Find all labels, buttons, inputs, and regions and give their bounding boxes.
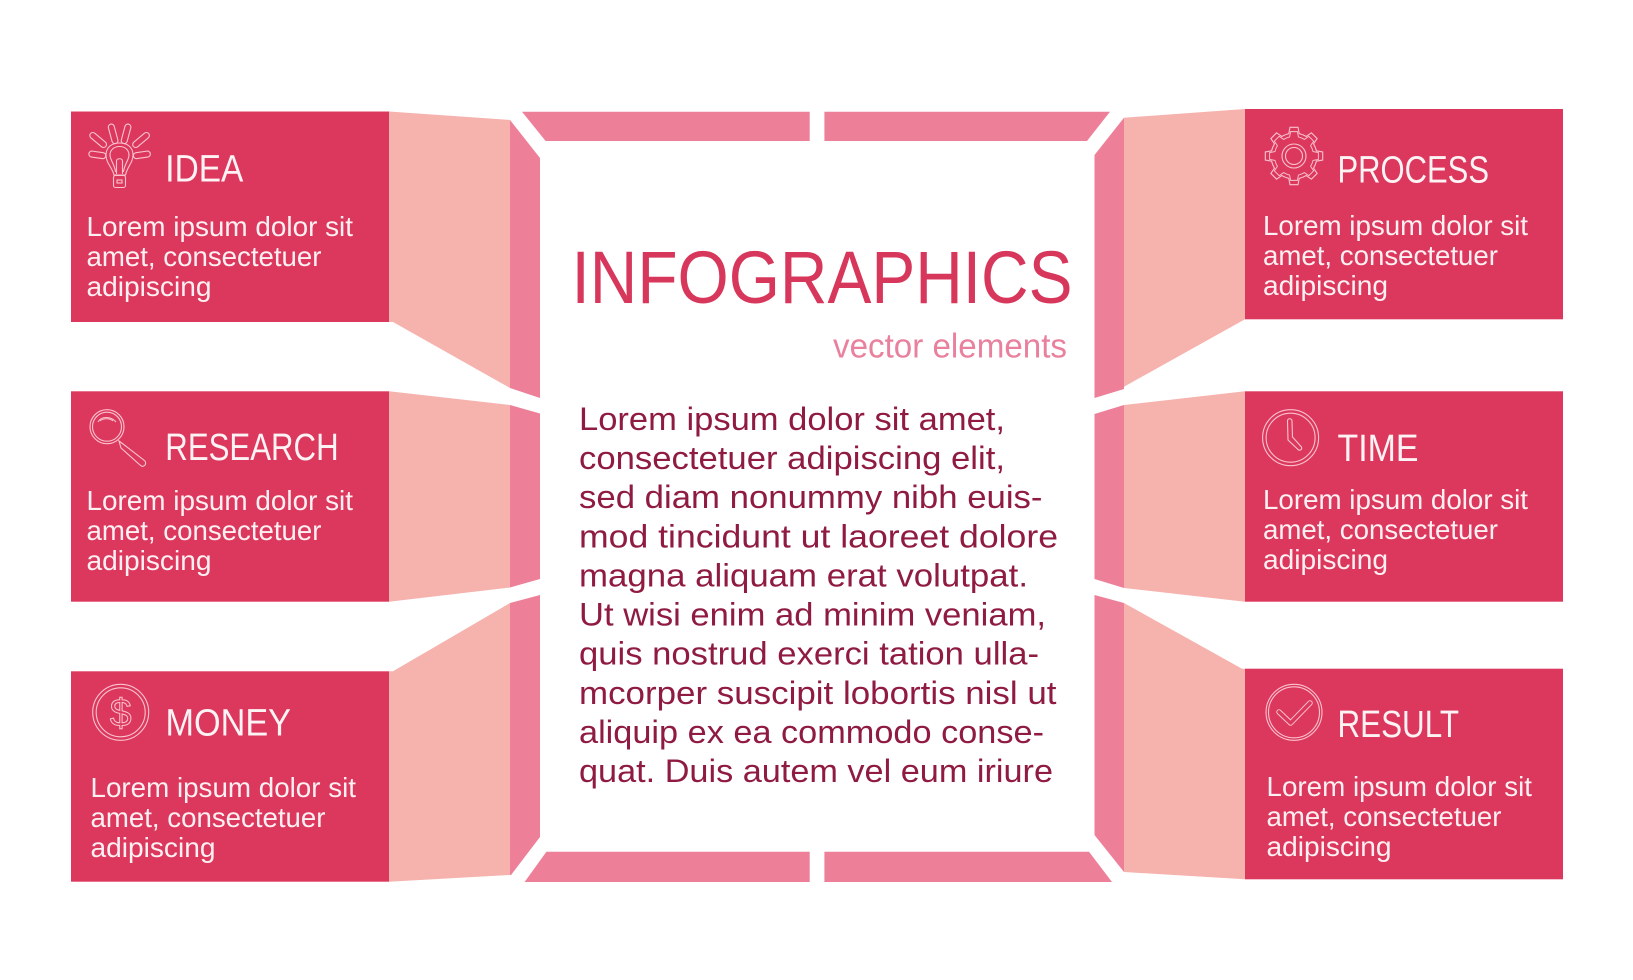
heading: process: PROCESS <box>1338 150 1489 192</box>
text: idea description: amet, consectetuer <box>86 241 322 272</box>
connector: process side <box>1094 118 1124 398</box>
connector: money light <box>389 603 510 882</box>
box: research <box>71 391 389 602</box>
text: process description: amet, consectetuer <box>1263 240 1498 271</box>
connector: research side <box>510 405 540 588</box>
box: result <box>1245 669 1563 879</box>
connector: research light <box>389 391 510 602</box>
text: time description: amet, consectetuer <box>1263 514 1498 545</box>
connector: result side <box>1094 595 1124 872</box>
panel: idea <box>71 112 540 398</box>
heading: money: MONEY <box>166 703 291 745</box>
text: idea description: Lorem ipsum dolor sit <box>86 211 353 242</box>
connector: time side <box>1094 405 1124 588</box>
heading: research: RESEARCH <box>165 427 339 469</box>
icon: clock <box>1263 410 1319 466</box>
connector: process light <box>1124 109 1245 387</box>
connector: time light <box>1124 391 1245 602</box>
text: result description: Lorem ipsum dolor sit <box>1266 771 1532 802</box>
frame: top right bar <box>824 112 1110 141</box>
icon: check mark <box>1266 684 1322 740</box>
text: main paragraph: Lorem ipsum dolor sit amet, <box>579 401 1005 437</box>
text: result description: adipiscing <box>1266 831 1392 862</box>
text: time description: Lorem ipsum dolor sit <box>1263 484 1528 515</box>
text: money description: Lorem ipsum dolor sit <box>90 772 356 803</box>
text: main paragraph: Ut wisi enim ad minim veniam, <box>579 596 1046 632</box>
icon: light bulb <box>88 123 151 188</box>
connector: money side <box>510 595 540 875</box>
text: idea description: adipiscing <box>86 271 212 302</box>
text: money description: adipiscing <box>90 832 216 863</box>
text: main paragraph <box>579 401 1058 789</box>
connector: idea light <box>389 112 510 388</box>
text: main paragraph: quat. Duis autem vel eum iriure <box>579 753 1053 789</box>
text: research description: amet, consectetuer <box>86 515 322 546</box>
panel: money <box>71 595 540 882</box>
frame: top left bar <box>522 112 810 141</box>
icon: dollar coin: $ <box>110 692 132 735</box>
text: main paragraph: quis nostrud exerci tation ulla- <box>579 636 1039 672</box>
text: main paragraph: magna aliquam erat volutpat. <box>579 558 1028 594</box>
icon: gear <box>1265 127 1323 185</box>
title: INFOGRAPHICS <box>572 236 1072 319</box>
panel: result <box>1094 595 1563 879</box>
heading: result: RESULT <box>1338 704 1459 746</box>
text: research description: adipiscing <box>86 545 212 576</box>
text: research description <box>86 485 353 576</box>
box: idea <box>71 112 389 322</box>
heading: time: TIME <box>1338 428 1418 470</box>
heading: idea: IDEA <box>165 149 244 191</box>
box: time <box>1245 391 1563 602</box>
text: time description: adipiscing <box>1263 544 1388 575</box>
box: money <box>71 671 389 882</box>
text: money description: amet, consectetuer <box>90 802 326 833</box>
icon: magnifier <box>90 410 146 466</box>
connector: result light <box>1124 603 1245 879</box>
subtitle: vector elements <box>833 328 1067 366</box>
text: result description <box>1266 771 1532 862</box>
text: main paragraph: sed diam nonummy nibh euis- <box>579 479 1042 515</box>
box: process <box>1245 109 1563 319</box>
text: process description: adipiscing <box>1263 270 1388 301</box>
frame: bottom left bar <box>525 852 810 882</box>
icon: dollar coin <box>93 684 149 740</box>
text: time description <box>1263 484 1528 575</box>
text: research description: Lorem ipsum dolor sit <box>86 485 353 516</box>
text: main paragraph: consectetuer adipiscing elit, <box>579 440 1005 476</box>
frame: bottom right bar <box>824 852 1112 882</box>
text: main paragraph: mcorper suscipit lobortis nisl ut <box>579 675 1056 711</box>
panel: research <box>71 391 540 602</box>
panel: process <box>1094 109 1563 398</box>
connector: idea side <box>510 120 540 398</box>
text: idea description <box>86 211 353 302</box>
text: result description: amet, consectetuer <box>1266 801 1502 832</box>
text: main paragraph: aliquip ex ea commodo conse- <box>579 714 1044 750</box>
panel: time <box>1094 391 1563 602</box>
text: money description <box>90 772 356 863</box>
text: process description <box>1263 210 1528 301</box>
text: main paragraph: mod tincidunt ut laoreet dolore <box>579 518 1058 554</box>
text: process description: Lorem ipsum dolor sit <box>1263 210 1528 241</box>
